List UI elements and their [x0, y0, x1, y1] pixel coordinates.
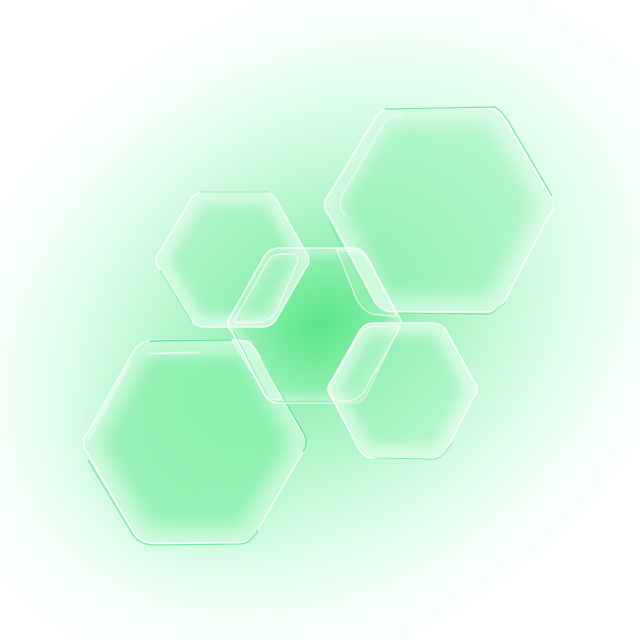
- lens: overlap with top right hexagon: [337, 250, 396, 316]
- hexagon: bottom left large: [84, 340, 306, 545]
- hexagon: top left small: [156, 192, 309, 327]
- lens: overlap with bottom left hexagon: [232, 340, 282, 400]
- hexagon: center with bright core: [228, 248, 401, 403]
- hexagon: lower right small: [328, 323, 477, 459]
- hexagon: top right large: [324, 107, 554, 314]
- lens: overlap with top left hexagon: [235, 254, 298, 323]
- lens: overlap with center hexagon: [331, 326, 398, 401]
